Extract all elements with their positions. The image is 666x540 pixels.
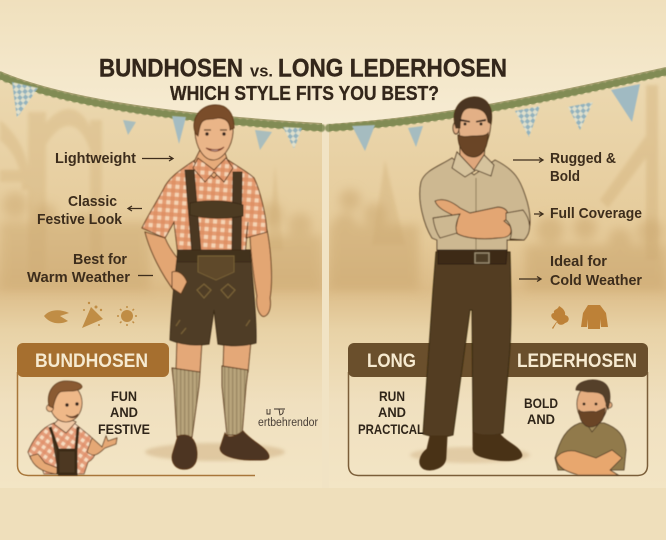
- box text: FUN: [111, 388, 137, 404]
- shirt collar: [452, 152, 494, 177]
- left feature labels: [27, 150, 136, 286]
- panel: left background scene: [0, 72, 322, 488]
- hair: [454, 97, 492, 128]
- left feature labels: Lightweight: [55, 150, 136, 167]
- box text: [98, 388, 150, 437]
- box text: AND: [110, 404, 138, 420]
- box header: [348, 343, 648, 377]
- garland: left: [0, 72, 322, 150]
- icon: party popper: [82, 302, 103, 328]
- shorts flap: [198, 256, 234, 280]
- figure: long lederhosen man: [410, 97, 530, 470]
- trousers: [423, 252, 511, 437]
- icons: long lederhosen row: [551, 305, 608, 329]
- belt: [438, 250, 507, 264]
- buttons: [475, 178, 477, 250]
- panel: bundhosen box: [17, 343, 255, 476]
- box text left: [358, 388, 424, 437]
- shorts embroidery: [176, 284, 250, 334]
- arrow: classic festive look: [128, 206, 142, 211]
- box text left: PRACTICAL: [358, 421, 424, 437]
- icon: sun: [117, 306, 137, 326]
- ground shadow: [410, 447, 530, 463]
- hair: [194, 105, 234, 136]
- suspenders: [185, 170, 242, 253]
- beard: [458, 133, 488, 157]
- arrow: lightweight: [142, 156, 173, 161]
- shorts: [170, 250, 256, 346]
- face: [458, 100, 491, 156]
- hand in pocket: [172, 271, 187, 294]
- arrow: cold weather: [519, 276, 541, 282]
- box text: FESTIVE: [98, 421, 150, 437]
- icon: pretzel: [44, 310, 69, 323]
- box text right: [524, 395, 558, 427]
- sock left: [172, 368, 200, 437]
- shirt: [420, 158, 530, 252]
- head: [195, 108, 233, 160]
- eyes: [460, 119, 486, 126]
- title: LONG LEDERHOSEN: [278, 54, 507, 82]
- panel: long lederhosen box: [348, 343, 648, 476]
- bunting flags left: [12, 82, 302, 150]
- sock right: [222, 366, 248, 435]
- ground shadow: [145, 443, 285, 461]
- right feature labels: Full Coverage: [550, 205, 642, 222]
- title: vs.: [250, 62, 273, 80]
- shirt: [142, 160, 267, 255]
- ear: [453, 122, 459, 134]
- box text right: AND: [527, 411, 555, 427]
- icon: oak leaf: [551, 306, 569, 329]
- neck: [460, 145, 485, 170]
- box outline: [348, 372, 648, 476]
- left feature labels: Festive Look: [37, 211, 123, 228]
- neck: [194, 150, 228, 178]
- box text left: RUN: [379, 388, 405, 404]
- forearm and hand right: [250, 230, 271, 316]
- garland: right: [329, 68, 666, 151]
- arrow: full coverage: [534, 212, 543, 216]
- box text right: BOLD: [524, 395, 558, 411]
- forearm left: [145, 232, 187, 292]
- right feature labels: Bold: [550, 168, 580, 185]
- belt buckle: [475, 253, 489, 263]
- centre divider: [322, 124, 329, 488]
- waistband: [177, 250, 251, 262]
- box header: [17, 343, 169, 377]
- header label lederhosen: LEDERHOSEN: [517, 351, 637, 372]
- face: [204, 130, 227, 151]
- sleeve cuff left: [433, 214, 460, 238]
- icons: bundhosen row: [44, 302, 137, 328]
- icon: jacket: [581, 305, 608, 329]
- shirt collar: [193, 158, 233, 182]
- right feature labels: [550, 150, 642, 289]
- right feature labels: Ideal for: [550, 253, 607, 270]
- figure: bundhosen man: [142, 105, 285, 469]
- bunting flags right: [352, 84, 640, 151]
- sky band: [0, 0, 666, 135]
- box text left: AND: [378, 404, 406, 420]
- watermark: [258, 409, 318, 429]
- legs: [176, 340, 251, 372]
- left feature labels: Classic: [68, 193, 117, 210]
- arrow: rugged: [513, 158, 543, 162]
- sleeve cuff right: [506, 210, 530, 240]
- watermark: ertbehrendor: [258, 417, 318, 429]
- right feature labels: Rugged &: [550, 150, 616, 167]
- panel: right background scene: [329, 70, 666, 488]
- left feature labels: Warm Weather: [27, 269, 130, 286]
- shoes: [172, 431, 269, 469]
- line: warm weather: [138, 274, 153, 276]
- cartoon: bearded man: [555, 380, 626, 475]
- box outline: [18, 372, 255, 476]
- title: BUNDHOSEN: [99, 54, 243, 82]
- header label long: LONG: [367, 351, 416, 372]
- cartoon: bundhosen man: [28, 381, 117, 474]
- subtitle: WHICH STYLE FITS YOU BEST?: [170, 82, 439, 105]
- right feature labels: Cold Weather: [550, 272, 642, 289]
- crossed arms: [435, 200, 511, 239]
- boots: [420, 432, 522, 470]
- header label: BUNDHOSEN: [35, 351, 148, 372]
- chest strap: [190, 201, 243, 218]
- title: [99, 54, 507, 82]
- left feature labels: Best for: [73, 251, 127, 268]
- bottom band: [0, 488, 666, 540]
